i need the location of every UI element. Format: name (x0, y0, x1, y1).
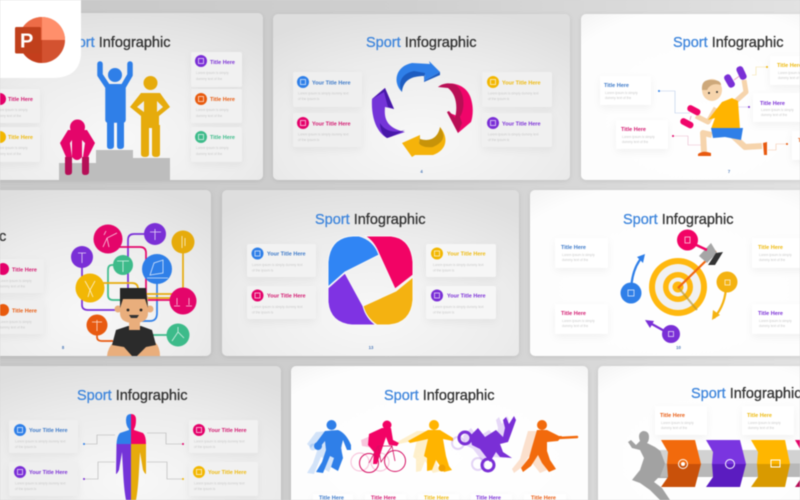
card: blue: dummy text of the (562, 258, 588, 262)
card: purple: dummy text of the (759, 324, 785, 328)
card: title pink (0, 89, 40, 123)
silhouette: soccer player (397, 420, 453, 473)
icon: rounded four petal shape (328, 236, 413, 325)
card: pink: Title Here (12, 268, 37, 274)
card: blue: Your Title Here (267, 252, 306, 258)
connector lines (83, 433, 184, 480)
figure: yellow second place (130, 76, 170, 157)
panel: target slide (530, 190, 800, 356)
card: title green (191, 127, 242, 162)
card: yellow: dummy text of the (748, 426, 774, 430)
card: yellow (418, 494, 459, 500)
card: pink: Lorem ipsum is simply dummy text (252, 305, 303, 309)
figure: athlete with dumbbells (679, 65, 767, 156)
card: yellow: Your Title Here (208, 470, 247, 476)
card: orange: Title Here (12, 308, 37, 314)
card: title pink: Title Here (8, 97, 33, 103)
card: purple: Lorem ipsum is simply dummy text (488, 132, 539, 136)
page number: 13 (369, 345, 374, 350)
card: yellow (426, 244, 496, 277)
card: blue: of the ipsum is (15, 445, 37, 449)
card: blue (313, 494, 353, 500)
card: blue: Lorem ipsum is simply (605, 91, 638, 95)
card: pink: of the ipsum is (298, 138, 320, 142)
card: title orange (191, 89, 242, 123)
card: title orange: Lorem ipsum is simply (196, 108, 229, 112)
card: blue: Lorem ipsum is simply dummy text (15, 440, 66, 444)
panel: running process slide (598, 366, 800, 500)
card: purple: of the ipsum is (15, 487, 37, 491)
step: orange (661, 440, 701, 487)
card: orange: Title Here (660, 413, 685, 419)
powerpoint badge (0, 0, 81, 78)
step: yellow (751, 440, 790, 487)
card: yellow (752, 238, 800, 268)
card: blue: Your Title Here (312, 80, 351, 86)
panel: sports network slide (0, 190, 211, 356)
icon: target (649, 258, 707, 316)
silhouette: cyclist (351, 420, 406, 472)
card: purple (471, 494, 512, 500)
card: purple: Lorem ipsum is simply dummy text (433, 305, 484, 309)
card: yellow: Your Title Here (447, 252, 486, 258)
podium (59, 150, 170, 180)
card: yellow (770, 56, 800, 85)
title: Sport Infographic (315, 212, 425, 228)
card: pink: Lorem ipsum is simply dummy text (298, 132, 349, 136)
card: yellow: dummy text of the (759, 258, 785, 262)
panel: sport silhouettes slide (291, 366, 588, 500)
card: title green: Title Here (210, 135, 235, 141)
card: orange: dummy text of the (661, 426, 687, 430)
title: Sport Infographic (623, 212, 733, 228)
figure: blue winner (100, 64, 130, 149)
card: blue: Title Here (561, 245, 586, 251)
card: blue: dummy text of the (605, 96, 631, 100)
panel: podium slide (0, 13, 263, 180)
card: blue: Lorem ipsum is simply (562, 253, 595, 257)
card: blue: Title Here (604, 83, 629, 89)
card: blue: of the ipsum is (298, 97, 320, 101)
card: pink: Lorem ipsum is simply (622, 135, 655, 139)
card: title yellow: Title Here (8, 135, 33, 141)
card: pink: Title Here (561, 311, 586, 317)
arrow: blue (397, 61, 440, 92)
card: orange (524, 494, 566, 500)
card: blue (9, 420, 78, 453)
panel: four petal slide (222, 190, 519, 356)
card: pink: of the ipsum is (194, 445, 216, 449)
figure: runner (628, 431, 670, 500)
card: yellow: Title Here (758, 245, 783, 251)
card: title orange: Title Here (210, 97, 235, 103)
panel: human body slide (0, 366, 281, 500)
connector lines (658, 66, 788, 150)
card: yellow: Title Here (747, 413, 772, 419)
card: purple: of the ipsum is (433, 310, 455, 314)
card: orange (0, 300, 44, 334)
arrow: pink (438, 83, 473, 133)
icon: sport circles (71, 223, 196, 346)
silhouette: basketball player (307, 420, 351, 474)
card: blue (293, 72, 362, 107)
card: purple (9, 462, 78, 496)
card: title purple: Title Here (210, 60, 235, 66)
card: blue: Lorem ipsum is simply dummy text (298, 92, 349, 96)
card: blue (555, 238, 608, 268)
card: title yellow (0, 127, 40, 162)
card: title orange: dummy text of the (196, 114, 222, 118)
card: yellow: of the ipsum is (488, 97, 510, 101)
arrow: dart (678, 243, 723, 288)
figure: pink third place (60, 120, 95, 175)
panel: fitness slide (581, 14, 800, 180)
title: Sport Infographic (366, 35, 476, 51)
icon: powerpoint logo: P (20, 30, 33, 52)
title: Sport Infographic (673, 35, 783, 51)
title: Sport Infographic (384, 388, 494, 404)
card: pink (555, 304, 608, 334)
card: blue: Lorem ipsum is simply dummy text (252, 263, 303, 267)
card: pink: dummy text of the (622, 140, 648, 144)
card: pink (293, 113, 362, 147)
card: pink (0, 259, 44, 293)
title: Sport Infographic (60, 35, 170, 51)
card: yellow: of the ipsum is (433, 268, 455, 272)
card: title purple (191, 52, 242, 87)
card: pink (189, 420, 258, 453)
card: yellow: Lorem ipsum is simply dummy text (488, 92, 539, 96)
card: yellow (482, 72, 552, 107)
card: purple: dummy text of the (761, 113, 787, 117)
card: yellow: Lorem ipsum is simply dummy text (194, 482, 245, 486)
page number: 4 (420, 169, 423, 174)
card: pink (247, 286, 316, 319)
card: purple: Your Title Here (29, 470, 68, 476)
card: pink: Lorem ipsum is simply dummy text (194, 440, 245, 444)
step: pink (795, 440, 800, 487)
card: pink: Your Title Here (267, 294, 306, 300)
silhouette: motocross rider (452, 416, 516, 471)
page number: 10 (676, 345, 681, 350)
node: blue (620, 254, 645, 304)
card: title purple: Lorem ipsum is simply (196, 71, 229, 75)
panel: circular arrows slide (273, 14, 570, 180)
network lines (82, 234, 183, 341)
card: pink: Your Title Here (208, 428, 247, 434)
card: yellow: Lorem ipsum is simply (748, 421, 781, 425)
card: blue: of the ipsum is (252, 268, 274, 272)
card: yellow: Lorem ipsum is simply (759, 253, 792, 257)
node: purple (645, 320, 680, 343)
card: yellow: of the ipsum is (194, 487, 216, 491)
card: purple (482, 113, 552, 147)
card: purple (752, 304, 800, 334)
arrow: purple (372, 88, 405, 138)
card: yellow (189, 462, 258, 496)
card: pink: dummy text of the (562, 324, 588, 328)
card: pink: Lorem ipsum is simply (562, 319, 595, 323)
card: purple: Lorem ipsum is simply (759, 319, 792, 323)
card: yellow: Lorem ipsum is simply dummy text (433, 263, 484, 267)
arrow: yellow (402, 127, 445, 157)
card: pink: of the ipsum is (252, 310, 274, 314)
card: yellow (742, 406, 794, 435)
step: purple (706, 440, 746, 487)
card: purple: Lorem ipsum is simply dummy text (15, 482, 66, 486)
card: orange (655, 406, 707, 435)
card: yellow: Your Title Here (502, 80, 541, 86)
card: blue: Your Title Here (29, 428, 68, 434)
card: blue (600, 76, 651, 105)
card: pink (616, 120, 668, 149)
card: orange (792, 131, 800, 160)
card: purple: Title Here (760, 101, 785, 107)
card: pink: Title Here (621, 127, 646, 133)
figure: character (107, 288, 160, 356)
card: purple: Title Here (758, 311, 783, 317)
card: purple: Lorem ipsum is simply (761, 108, 794, 112)
card: purple: Your Title Here (447, 294, 486, 300)
card: title purple: dummy text of the (196, 77, 222, 81)
band: grey ribbon (660, 450, 800, 477)
card: blue (247, 244, 316, 277)
title: Sport Infographic (691, 386, 800, 402)
node: pink (677, 230, 707, 250)
node: yellow (712, 272, 738, 320)
page number: 7 (728, 169, 731, 174)
figure: human body (116, 414, 146, 500)
card: orange: Lorem ipsum is simply (661, 421, 694, 425)
title: Sport Infographic (77, 388, 187, 404)
card: title green: dummy text of the (196, 152, 222, 156)
card: title green: Lorem ipsum is simply (196, 146, 229, 150)
card: pink (365, 494, 406, 500)
card: purple: of the ipsum is (488, 138, 510, 142)
card: purple: Your Title Here (502, 122, 541, 128)
card: purple (753, 93, 800, 122)
card: pink: Your Title Here (312, 122, 351, 128)
page number: 8 (62, 345, 65, 350)
card: purple (426, 286, 496, 319)
silhouette: baseball batter (512, 420, 577, 473)
